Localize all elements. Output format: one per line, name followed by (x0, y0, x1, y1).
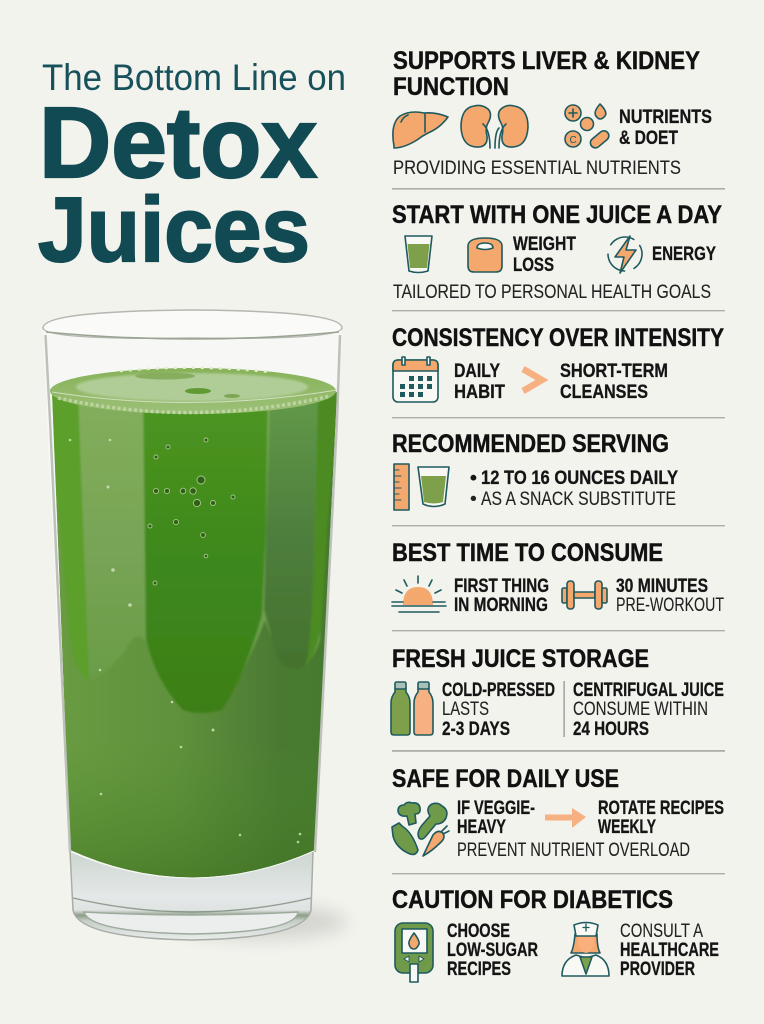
section: caution for diabetics: CAUTION FOR DIABETICS (392, 886, 673, 914)
section: recommended serving: RECOMMENDED SERVING (392, 430, 669, 458)
label: cold-pressed: COLD-PRESSED (442, 679, 555, 701)
juice foam surface (50, 368, 337, 414)
icon: glass (405, 236, 432, 272)
label: weight loss: WEIGHT (513, 233, 576, 255)
label: rotate recipes weekly: ROTATE RECIPES (598, 797, 724, 819)
icon: calendar (393, 357, 438, 402)
label: consult a healthcare provider: CONSULT A (620, 920, 703, 942)
label: short-term cleanses: CLEANSES (560, 381, 648, 403)
label: thirty minutes pre-workout: 30 MINUTES (616, 575, 708, 597)
icon: nurse (562, 922, 609, 976)
section: fresh juice storage (391, 645, 724, 740)
label: choose low-sugar recipes: CHOOSE (447, 920, 510, 942)
label: centrifugal juice (573, 679, 724, 740)
section: best time to consume: BEST TIME TO CONSUME (392, 539, 663, 567)
label: if veggie-heavy (457, 797, 535, 838)
label: rotate recipes weekly: WEEKLY (598, 816, 656, 838)
icon: serving glass (418, 467, 449, 506)
icon: ruler (394, 464, 409, 510)
list: serving amounts: AS A SNACK SUBSTITUTE (481, 488, 676, 510)
icon: kidneys (461, 105, 528, 148)
label: thirty minutes pre-workout: PRE-WORKOUT (616, 594, 724, 616)
section: safe for daily use: PREVENT NUTRIENT OVERLOAD (457, 839, 690, 861)
bubbles (148, 438, 235, 585)
title: The Bottom Line on (42, 57, 346, 98)
list: serving amounts: • (470, 467, 477, 489)
title: Detox (39, 87, 317, 199)
title (38, 57, 346, 281)
icon: sunrise (392, 576, 446, 612)
label: weight loss (513, 233, 576, 276)
label: choose low-sugar recipes: LOW-SUGAR (447, 939, 538, 961)
section: supports liver and kidney function: PROVIDING ESSENTIAL NUTRIENTS (393, 157, 681, 179)
section: caution for diabetics (392, 886, 719, 982)
list: serving amounts: 12 TO 16 OUNCES DAILY (481, 467, 678, 489)
label: cold-pressed: LASTS (442, 698, 489, 720)
section: supports liver and kidney function: FUNCTION (393, 73, 509, 101)
icon: vegetables (392, 802, 449, 856)
icon: glucose meter (395, 923, 433, 982)
glass of green juice (43, 310, 347, 940)
section: safe for daily use (392, 765, 724, 861)
label: first thing in morning: FIRST THING (454, 575, 549, 597)
section: recommended serving (392, 430, 678, 510)
label: first thing in morning (454, 575, 549, 616)
label: thirty minutes pre-workout (616, 575, 724, 616)
icon: weighing scale (468, 238, 502, 272)
label: daily habit: DAILY (454, 360, 500, 382)
label: if veggie-heavy: HEAVY (457, 816, 506, 838)
icon: dumbbell (562, 581, 607, 609)
title: Juices (38, 179, 310, 281)
label: nutrients and diet: & DOET (619, 127, 678, 149)
label: consult a healthcare provider (620, 920, 719, 980)
section: supports liver and kidney function: SUPPORTS LIVER & KIDNEY (393, 47, 700, 75)
label: cold-pressed (442, 679, 555, 740)
icon: energy bolt (602, 231, 648, 277)
label: choose low-sugar recipes: RECIPES (447, 958, 511, 980)
section: best time to consume (392, 539, 724, 616)
section: safe for daily use: SAFE FOR DAILY USE (392, 765, 619, 793)
label: short-term cleanses (560, 360, 668, 403)
label: choose low-sugar recipes (447, 920, 538, 980)
label: first thing in morning: IN MORNING (454, 594, 548, 616)
section: consistency over intensity (392, 324, 724, 403)
icon: arrow (545, 808, 586, 828)
section: fresh juice storage: FRESH JUICE STORAGE (392, 645, 649, 673)
label: centrifugal juice: CONSUME WITHIN (573, 698, 708, 720)
label: cold-pressed: 2-3 DAYS (442, 718, 510, 740)
label: rotate recipes weekly (598, 797, 724, 838)
label: weight loss: LOSS (513, 254, 554, 276)
icon: nutrients: C (570, 135, 577, 146)
section: start with one juice a day: START WITH ONE JUICE A DAY (392, 201, 722, 229)
label: daily habit: HABIT (454, 381, 505, 403)
icon: greater-than sign (523, 369, 542, 391)
icon: juice bottles (391, 682, 433, 735)
label: consult a healthcare provider: PROVIDER (620, 958, 695, 980)
section: start with one juice a day: ENERGY (652, 243, 716, 265)
icon: liver (393, 112, 448, 148)
label: nutrients and diet (619, 106, 712, 149)
label: centrifugal juice: 24 HOURS (573, 718, 649, 740)
label: if veggie-heavy: IF VEGGIE- (457, 797, 535, 819)
list: serving amounts: • (470, 488, 477, 510)
label: consult a healthcare provider: HEALTHCARE (620, 939, 719, 961)
icon: nutrients (565, 104, 611, 150)
list: serving amounts (470, 467, 678, 510)
label: nutrients and diet: NUTRIENTS (619, 106, 712, 128)
label: short-term cleanses: SHORT-TERM (560, 360, 668, 382)
label: daily habit (454, 360, 505, 403)
section: start with one juice a day (392, 201, 722, 303)
section: supports liver and kidney function (393, 47, 712, 179)
